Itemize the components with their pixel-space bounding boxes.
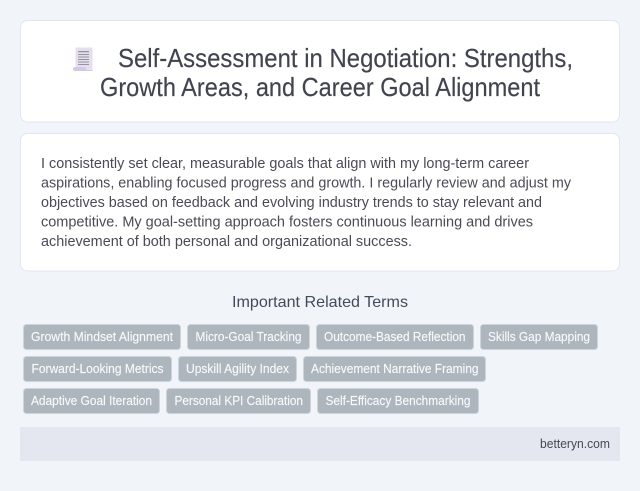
tag: Personal KPI Calibration: Personal KPI Calibration [174, 393, 303, 408]
tag: Skills Gap Mapping: Skills Gap Mapping [488, 329, 590, 344]
tag: Outcome-Based Reflection: Outcome-Based Reflection [324, 329, 466, 344]
panel: self-assessment paragraph [20, 134, 620, 271]
tag: Adaptive Goal Iteration [24, 388, 160, 414]
tag: Achievement Narrative Framing: Achievement Narrative Framing [311, 361, 478, 376]
panel: title card [20, 20, 620, 122]
tag: Growth Mindset Alignment [24, 324, 180, 350]
tag: Upskill Agility Index: Upskill Agility Index [186, 361, 290, 376]
text block: paragraph: I consistently set clear, measurable goals that align with my long-term career [41, 156, 529, 172]
tag: Upskill Agility Index [178, 356, 296, 382]
text block: paragraph: aspirations, enabling focused progress and growth. I regularly review and adjust my [41, 176, 572, 192]
heading: title: Self-Assessment in Negotiation: Strengths, [118, 45, 573, 73]
tag: Self-Efficacy Benchmarking [318, 388, 478, 414]
tag: Forward-Looking Metrics [24, 356, 172, 382]
panel: related term tags [24, 324, 598, 414]
text block: paragraph: achievement of both personal and organizational success. [41, 234, 412, 250]
tag: Outcome-Based Reflection [316, 324, 474, 350]
footer bar [20, 427, 620, 461]
tag: Micro-Goal Tracking: Micro-Goal Tracking [196, 329, 302, 344]
icon: scroll document [73, 48, 92, 71]
tag: Micro-Goal Tracking [188, 324, 310, 350]
tag: Personal KPI Calibration [166, 388, 310, 414]
tag: Achievement Narrative Framing [304, 356, 486, 382]
tag: Self-Efficacy Benchmarking: Self-Efficacy Benchmarking [326, 393, 470, 408]
text block: paragraph: competitive. My goal-setting approach fosters continuous learning and drives [41, 214, 533, 230]
tag: Forward-Looking Metrics: Forward-Looking Metrics [32, 361, 164, 376]
text block: paragraph: objectives based on feedback and evolving industry trends to stay relevant and [41, 195, 542, 211]
footer text: source: betteryn.com [540, 436, 610, 451]
heading: important related terms: Important Related Terms [232, 294, 408, 311]
tag: Growth Mindset Alignment: Growth Mindset Alignment [31, 329, 173, 344]
tag: Adaptive Goal Iteration: Adaptive Goal Iteration [31, 393, 152, 408]
heading: title: Growth Areas, and Career Goal Alignment [100, 74, 540, 102]
tag: Skills Gap Mapping [480, 324, 598, 350]
